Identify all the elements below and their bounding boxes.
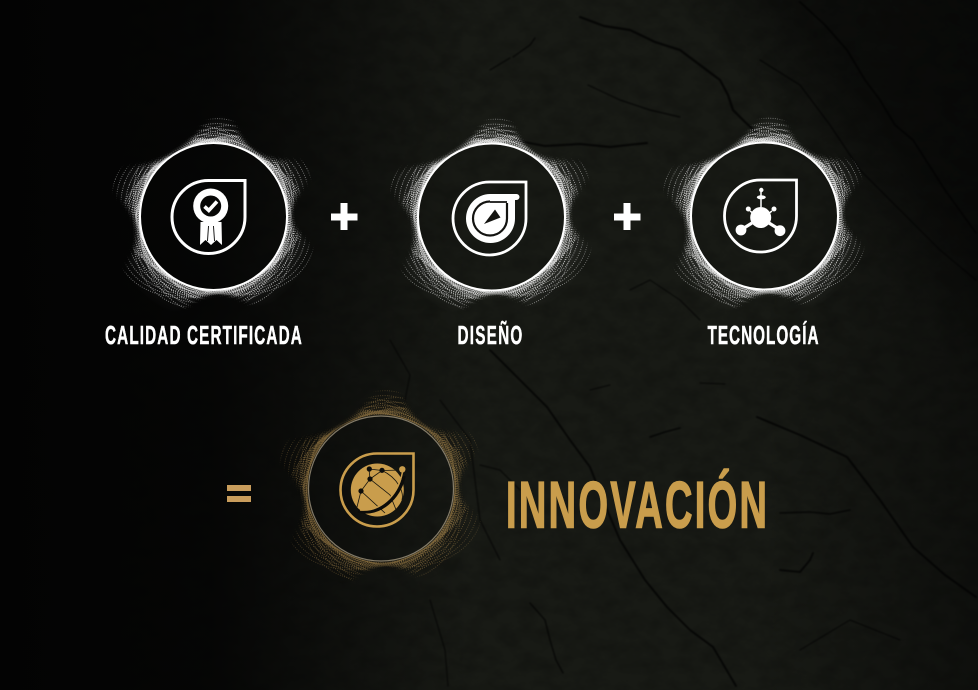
icon: certified rosette in drop [172,180,245,253]
icon: globe network in drop [340,454,414,526]
halo: white dotted ring [112,118,314,309]
badge: calidad certificada [112,118,314,309]
plus sign [331,203,358,230]
icon: molecule in drop [724,180,796,252]
equals sign [227,485,251,502]
halo: white dotted ring [390,118,592,310]
label: tecnología: TECNOLOGÍA [708,322,819,350]
halo: white dotted ring [663,118,864,308]
icon: design spiral in drop [453,182,526,255]
heading: innovación: INNOVACIÓN [506,469,767,542]
label: calidad certificada: CALIDAD CERTIFICADA [105,322,302,350]
badge: tecnología [663,118,864,308]
label: diseño: DISEÑO [458,322,522,350]
plus sign [614,203,640,230]
halo: gold dotted ring [280,390,481,581]
badge: innovación [280,390,481,581]
badge: diseño [390,118,592,310]
